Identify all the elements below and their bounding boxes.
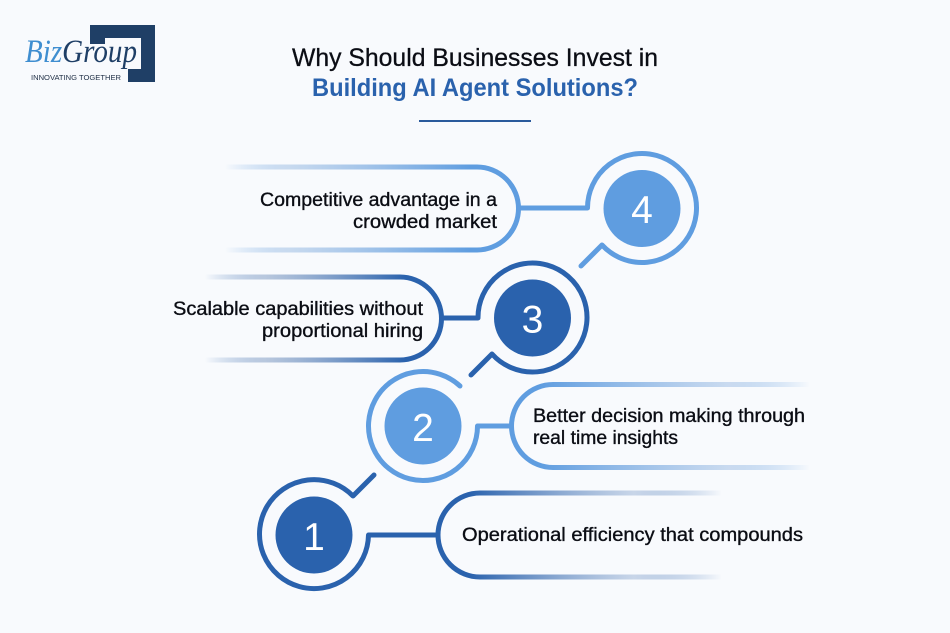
pill outline 2	[512, 384, 810, 468]
ring and connector 1	[260, 475, 438, 589]
title	[292, 44, 658, 102]
logo tagline: INNOVATING TOGETHER	[31, 73, 122, 82]
number 3: 3	[522, 298, 543, 342]
number 4: 4	[631, 189, 653, 232]
item 4: competitive advantage	[225, 153, 696, 266]
logo bracket shape	[90, 25, 155, 82]
pill outline 4	[225, 167, 518, 250]
label 3 line one: Scalable capabilities without	[173, 299, 424, 320]
badge 2	[384, 388, 462, 464]
pill outline 3	[205, 277, 441, 360]
item 3: scalable capabilities	[173, 263, 587, 375]
label 2	[533, 406, 805, 449]
number 2: 2	[412, 407, 434, 450]
logo	[25, 25, 155, 82]
label 3	[173, 299, 424, 342]
item 1: operational efficiency	[260, 475, 803, 589]
badge 1	[276, 496, 352, 574]
label 4 line one: Competitive advantage in a	[260, 190, 497, 211]
ring and connector 2	[368, 372, 511, 481]
item 2: better decision making	[368, 372, 810, 481]
label 3 line two: proportional hiring	[262, 321, 423, 342]
logo wordmark: BizGroup	[25, 34, 137, 70]
badge 3	[494, 280, 571, 356]
label 1: Operational efficiency that compounds	[462, 525, 803, 546]
title line one: Why Should Businesses Invest in	[292, 44, 658, 72]
connector and ring 4	[520, 153, 696, 266]
label 4 line two: crowded market	[353, 212, 498, 233]
title underline	[419, 120, 531, 122]
title line two: Building AI Agent Solutions?	[312, 74, 638, 102]
label 2 line two: real time insights	[533, 428, 678, 449]
connector and ring 3	[443, 263, 587, 375]
pill outline 1	[438, 493, 722, 577]
badge 4	[604, 170, 680, 247]
number 1: 1	[303, 516, 325, 559]
label 4	[260, 190, 498, 233]
label 2 line one: Better decision making through	[533, 406, 805, 427]
